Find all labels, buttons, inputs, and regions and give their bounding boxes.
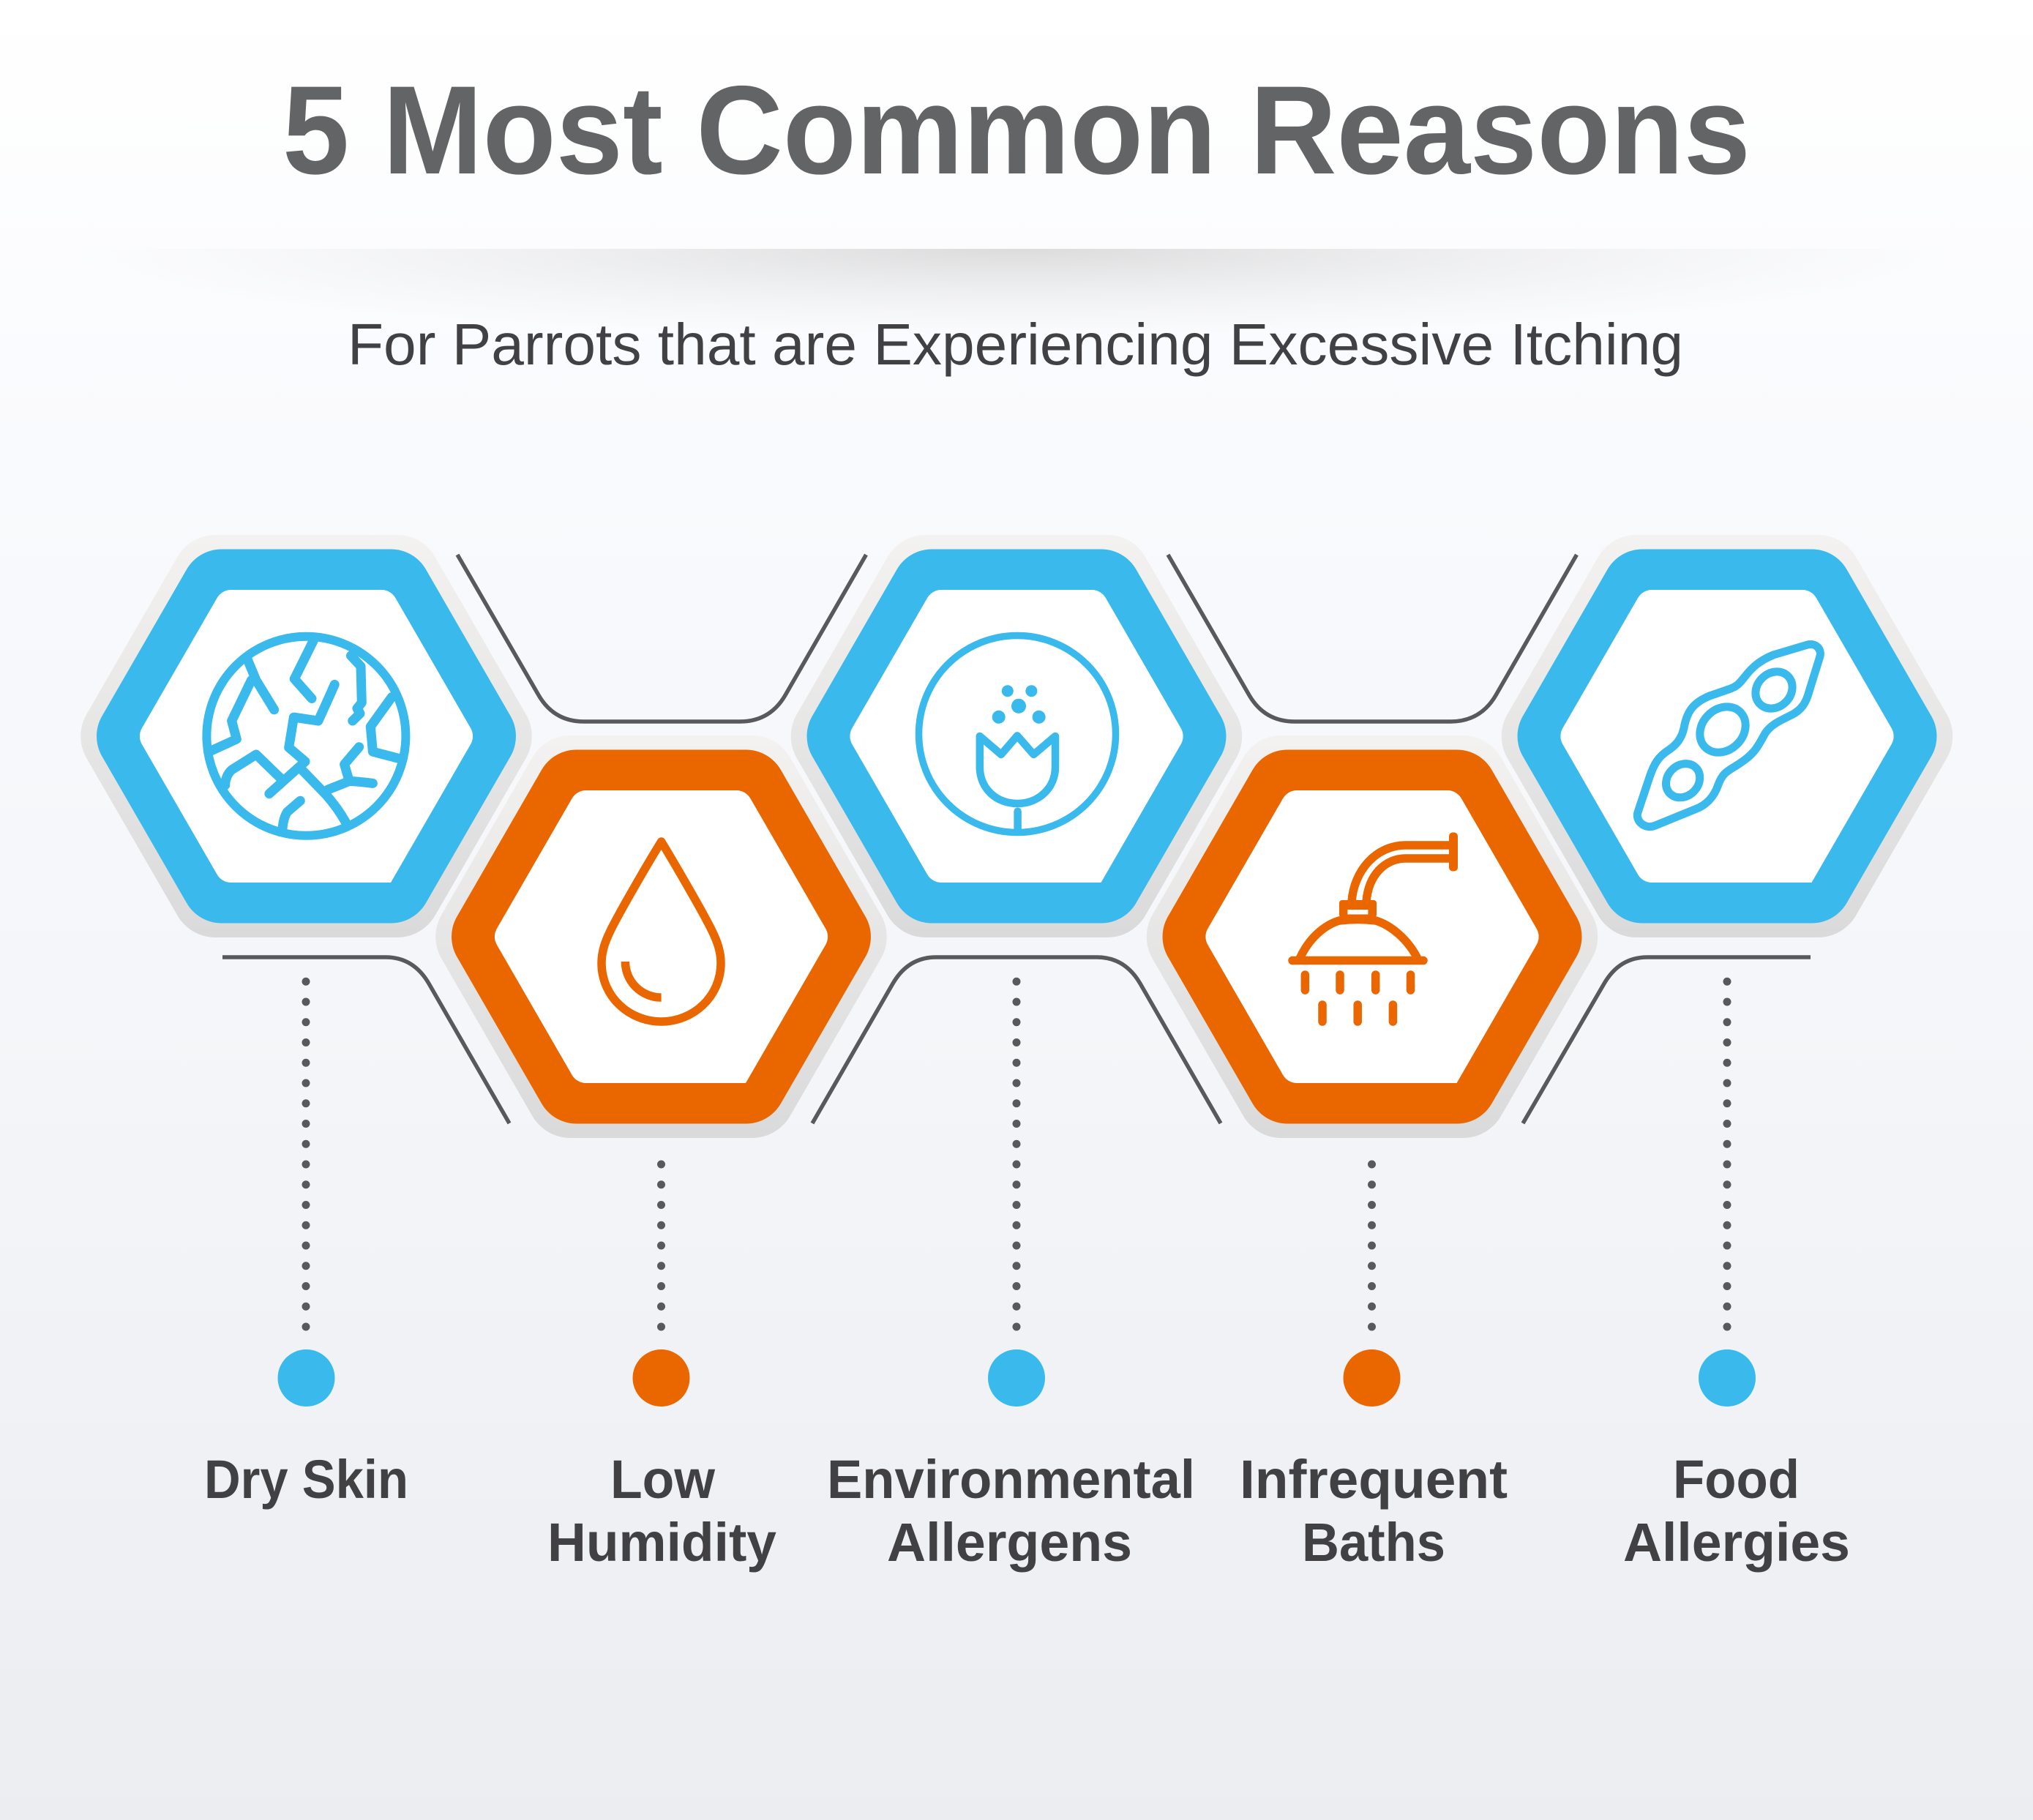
dot: infrequent baths [1344,1349,1401,1407]
icon: pea pod [1637,644,1820,827]
dot: dry skin [278,1349,335,1407]
upper connector line right [1168,555,1576,722]
hexagon: dry skin [81,535,532,937]
hexagon: low humidity [435,735,887,1138]
icon: pollen flower [919,635,1115,833]
label: low humidity: Low [610,1449,715,1510]
hexagon: environmental allergens [791,535,1242,937]
label: food allergies [1623,1449,1850,1573]
label: low humidity: Humidity [547,1512,776,1573]
icon: water drop [602,842,721,1022]
label: low humidity [547,1449,776,1573]
lower connector line middle [812,957,1221,1123]
label: food allergies: Food [1673,1449,1800,1510]
dotted leader: infrequent baths [1368,1164,1376,1327]
dot: low humidity [632,1349,689,1407]
title: 5 Most Common Reasons [282,60,1751,201]
icon: shower head [1292,833,1458,1022]
hexagon: infrequent baths [1147,735,1598,1138]
label: infrequent baths [1240,1449,1508,1573]
dotted leader: dry skin [302,981,310,1327]
icon: cracked skin globe [206,637,405,836]
label: infrequent baths: Baths [1302,1512,1445,1573]
dot: food allergies [1699,1349,1756,1407]
dotted leader: low humidity [657,1164,665,1327]
label: environmental allergens [827,1449,1195,1573]
lower connector line left [222,957,509,1123]
label: environmental allergens: Environmental [827,1449,1195,1510]
label: food allergies: Allergies [1623,1512,1850,1573]
lower connector line right [1523,957,1811,1123]
dotted leader: environmental allergens [1013,981,1020,1327]
subtitle: For Parrots that are Experiencing Excessive Itching [348,312,1683,377]
label: environmental allergens: Allergens [887,1512,1132,1573]
title shadow divider [65,249,1968,337]
label: dry skin: Dry Skin [204,1449,408,1510]
hexagon: food allergies [1502,535,1952,937]
dot: environmental allergens [988,1349,1045,1407]
label: infrequent baths: Infrequent [1240,1449,1508,1510]
dotted leader: food allergies [1723,981,1731,1327]
upper connector line left [457,555,866,722]
